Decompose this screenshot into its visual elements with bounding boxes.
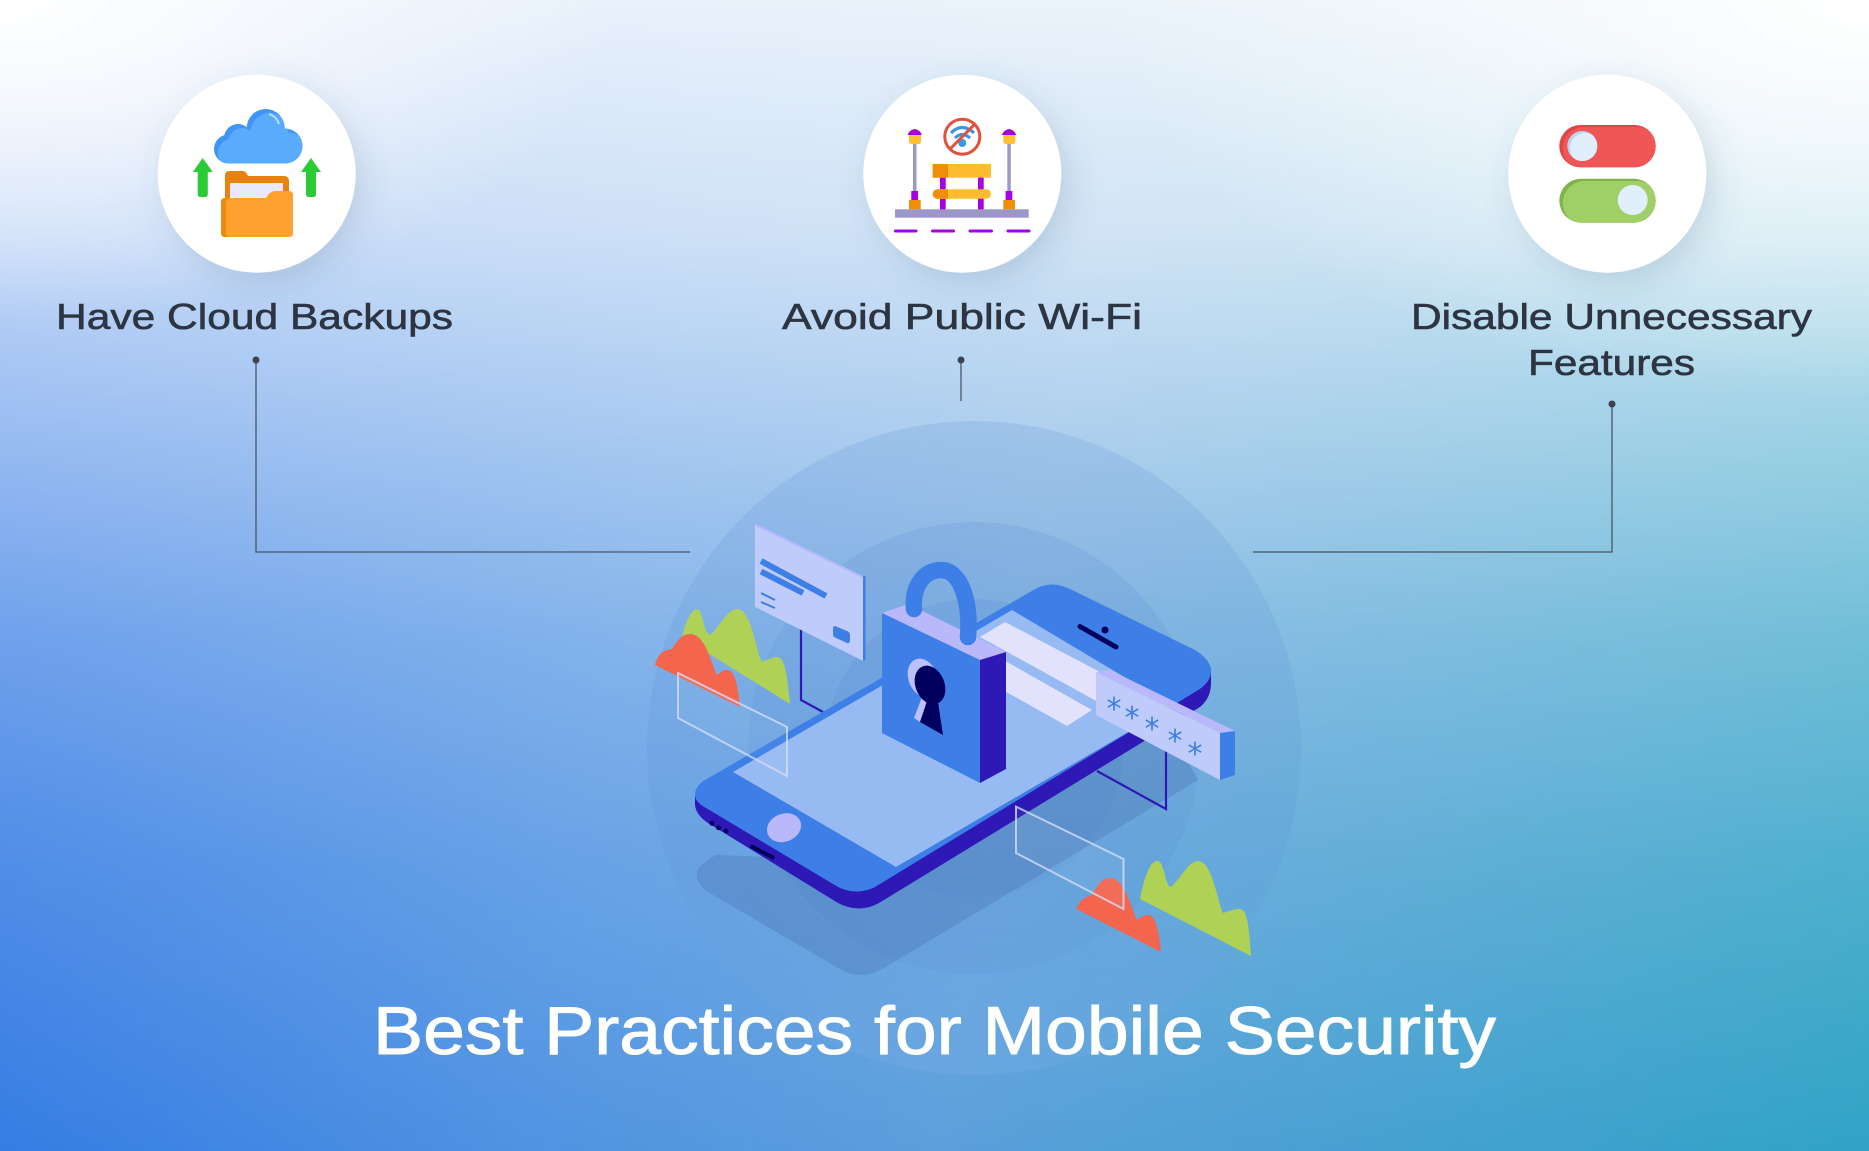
- red mountain left: [655, 634, 740, 707]
- label: disable unnecessary features: Features: [1528, 342, 1695, 383]
- icon: bench: [895, 164, 1029, 218]
- icon: folder: [221, 171, 293, 237]
- connector: disable features: [1253, 400, 1616, 552]
- icon: no wi-fi sign: [945, 119, 980, 154]
- icon: red toggle off: [1559, 125, 1659, 169]
- stem behind password bar: [1097, 745, 1166, 809]
- icon circle: public wi-fi: [863, 75, 1061, 273]
- icon: cloud: [214, 109, 302, 164]
- password asterisks: *: [1106, 692, 1122, 727]
- frame right: [1016, 807, 1124, 909]
- info card: [755, 523, 866, 661]
- keyhole: [902, 654, 951, 735]
- phone top face: [695, 584, 1211, 892]
- connector: public wi-fi: [958, 356, 964, 401]
- label: have cloud backups: Have Cloud Backups: [56, 296, 453, 337]
- phone side: [695, 668, 1211, 908]
- phone side dots and slot: [710, 821, 773, 857]
- green mountain right: [1140, 861, 1251, 956]
- label: disable unnecessary features: [1411, 296, 1812, 383]
- red mountain right: [1076, 878, 1161, 952]
- password asterisks: *: [1124, 701, 1140, 736]
- password asterisks: *: [1188, 737, 1202, 772]
- frame left: [678, 673, 787, 776]
- connector: cloud backups: [252, 356, 690, 552]
- phone screen: [733, 610, 1173, 867]
- label: disable unnecessary features: Disable Unnecessary: [1411, 296, 1812, 337]
- password asterisks: *: [1144, 712, 1160, 747]
- password asterisks: *: [1168, 724, 1182, 759]
- icon: right lamp: [1002, 129, 1016, 209]
- password asterisks: [1106, 692, 1202, 772]
- home button: [763, 808, 805, 847]
- phone speaker and camera: [1080, 626, 1116, 647]
- illustration: phone with lock: [655, 523, 1251, 975]
- green mountain left: [682, 609, 790, 704]
- title: Best Practices for Mobile Security: [373, 993, 1496, 1069]
- phone shadow: [697, 690, 1198, 975]
- icon circle: cloud backups: [158, 75, 356, 273]
- icon: road dashes: [896, 230, 1029, 232]
- icon: green toggle on: [1559, 179, 1659, 225]
- icon circle: disable features: [1508, 75, 1706, 273]
- icon: upload arrows: [193, 158, 321, 197]
- password bar: [1096, 670, 1235, 780]
- label: avoid public wi-fi: Avoid Public Wi-Fi: [782, 296, 1142, 337]
- padlock: [882, 570, 1006, 783]
- card stem: [801, 625, 823, 712]
- icon: left lamp: [908, 129, 922, 209]
- screen strips: [980, 622, 1100, 726]
- background circles: [647, 421, 1301, 1075]
